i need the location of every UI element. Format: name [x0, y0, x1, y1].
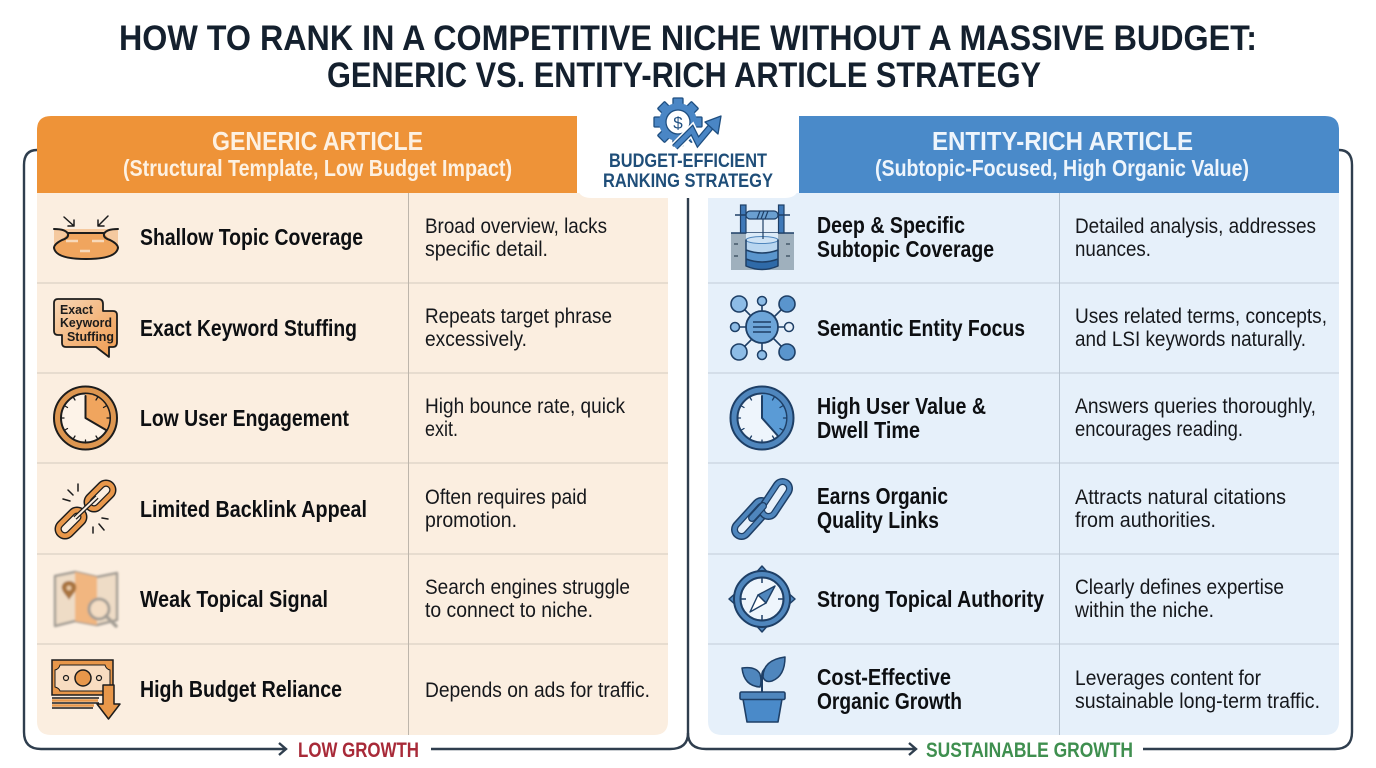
text: keyword description: excessively.	[425, 328, 527, 351]
title	[119, 19, 1257, 95]
row: weak topical signal	[55, 572, 630, 626]
row: semantic entity focus	[730, 296, 1327, 360]
label: cost-effective organic growth: Cost-Effective	[817, 664, 951, 690]
row: low user engagement	[54, 386, 625, 450]
label: exact keyword stuffing: Exact Keyword Stuffing	[140, 315, 357, 341]
text: links description	[1075, 486, 1286, 532]
text: engagement description: High bounce rate, quick	[425, 395, 625, 418]
text: keyword description: Repeats target phrase	[425, 305, 612, 328]
bracket arrow: low growth: LOW GROWTH	[298, 739, 419, 762]
text: links description: from authorities.	[1075, 509, 1216, 532]
label: deep subtopic coverage: Deep & Specific	[817, 212, 965, 238]
panel: generic article	[37, 116, 668, 735]
icon: blue clock	[730, 386, 794, 450]
header: entity-rich article	[799, 116, 1339, 193]
row: exact keyword stuffing	[54, 299, 612, 357]
text: user value description: encourages reading.	[1075, 418, 1243, 441]
header: entity-rich article: ENTITY-RICH ARTICLE	[932, 128, 1193, 156]
text: semantic description: and LSI keywords naturally.	[1075, 328, 1306, 351]
text: shallow description	[425, 215, 607, 261]
title: GENERIC VS. ENTITY-RICH ARTICLE STRATEGY	[327, 56, 1041, 95]
label: high user value and dwell time	[817, 393, 986, 443]
icon: connected chain	[742, 488, 782, 530]
text: semantic description: Uses related terms, concepts,	[1075, 305, 1327, 328]
text: growth description: sustainable long-term traffic.	[1075, 690, 1320, 713]
row: shallow topic coverage	[54, 215, 607, 261]
text: links description: Attracts natural citations	[1075, 486, 1286, 509]
text: shallow description: specific detail.	[425, 238, 548, 261]
icon: shallow bowl	[54, 216, 118, 259]
icon: entity network	[730, 296, 795, 360]
row: limited backlink appeal	[63, 484, 587, 533]
text: authority description	[1074, 576, 1284, 622]
label: shallow topic coverage: Shallow Topic Coverage	[140, 224, 363, 250]
icon: keyword speech bubble: Stuffing	[67, 330, 114, 344]
icon: compass	[729, 566, 795, 632]
text: deep description	[1075, 215, 1316, 261]
text: budget description: Depends on ads for traffic.	[425, 679, 650, 702]
label: low user engagement: Low User Engagement	[140, 405, 349, 431]
label: deep subtopic coverage	[817, 212, 994, 262]
text: backlink description: Often requires paid	[425, 486, 587, 509]
header: generic article	[37, 116, 577, 193]
row: strong topical authority	[729, 566, 1284, 632]
header: generic article: GENERIC ARTICLE	[212, 128, 423, 156]
text: shallow description: Broad overview, lacks	[425, 215, 607, 238]
icon: keyword speech bubble	[54, 299, 117, 357]
label: earns organic quality links	[817, 483, 948, 533]
text: semantic description	[1075, 305, 1327, 351]
icon: potted plant	[740, 657, 785, 722]
title: HOW TO RANK IN A COMPETITIVE NICHE WITHOUT A MASSIVE BUDGET:	[119, 19, 1257, 58]
row: cost-effective organic growth	[740, 657, 1320, 722]
label: deep subtopic coverage: Subtopic Coverage	[817, 236, 994, 262]
bracket arrow: sustainable growth: SUSTAINABLE GROWTH	[926, 739, 1133, 762]
label: semantic entity focus: Semantic Entity Focus	[817, 315, 1025, 341]
text: authority description: Clearly defines expertise	[1075, 576, 1284, 599]
badge: budget-efficient ranking strategy	[577, 96, 799, 198]
header: generic article: (Structural Template, Low Budget Impact)	[123, 155, 512, 181]
text: growth description: Leverages content for	[1075, 667, 1261, 690]
icon: money with down arrow	[52, 660, 120, 719]
label: weak topical signal: Weak Topical Signal	[140, 586, 328, 612]
label: high user value and dwell time: High User Value &	[817, 393, 986, 419]
label: high budget reliance: High Budget Reliance	[140, 676, 342, 702]
icon: gear with dollar and rising arrow	[654, 98, 721, 147]
text: engagement description: exit.	[425, 418, 458, 441]
badge: budget-efficient ranking strategy: BUDGET-EFFICIENT	[609, 150, 767, 172]
badge: budget-efficient ranking strategy: RANKING STRATEGY	[603, 170, 773, 192]
text: deep description: nuances.	[1075, 238, 1151, 261]
text: signal description: Search engines struggle	[425, 576, 630, 599]
text: keyword description	[425, 305, 612, 351]
text: user value description	[1075, 395, 1316, 441]
label: limited backlink appeal: Limited Backlink Appeal	[140, 496, 367, 522]
text: backlink description: promotion.	[425, 509, 517, 532]
icon: deep well	[731, 205, 794, 270]
panel: entity-rich article	[708, 116, 1339, 735]
text: deep description: Detailed analysis, addresses	[1075, 215, 1316, 238]
row: high user value	[730, 386, 1316, 450]
text: backlink description	[425, 486, 587, 532]
label: cost-effective organic growth: Organic Growth	[817, 688, 962, 714]
label: earns organic quality links: Earns Organic	[817, 483, 948, 509]
label: strong topical authority: Strong Topical Authority	[817, 586, 1044, 612]
icon: gear with dollar and rising arrow: $	[673, 114, 683, 132]
text: user value description: Answers queries thoroughly,	[1075, 395, 1316, 418]
header: entity-rich article: (Subtopic-Focused, High Organic Value)	[875, 155, 1249, 181]
text: engagement description	[425, 395, 625, 441]
text: authority description: within the niche.	[1074, 599, 1214, 622]
text: growth description	[1075, 667, 1320, 713]
text: signal description	[425, 576, 630, 622]
label: earns organic quality links: Quality Links	[817, 507, 939, 533]
label: cost-effective organic growth	[817, 664, 962, 714]
icon: orange clock	[54, 386, 117, 450]
label: high user value and dwell time: Dwell Time	[817, 417, 920, 443]
row: deep subtopic coverage	[731, 205, 1316, 270]
row: high budget reliance	[52, 660, 650, 719]
icon: keyword speech bubble: Exact	[60, 303, 94, 317]
icon: blurred map	[55, 572, 117, 626]
row: earns organic quality links	[742, 483, 1286, 533]
text: signal description: to connect to niche.	[425, 599, 593, 622]
icon: keyword speech bubble: Keyword	[60, 316, 112, 330]
icon: broken chain link	[63, 484, 108, 533]
